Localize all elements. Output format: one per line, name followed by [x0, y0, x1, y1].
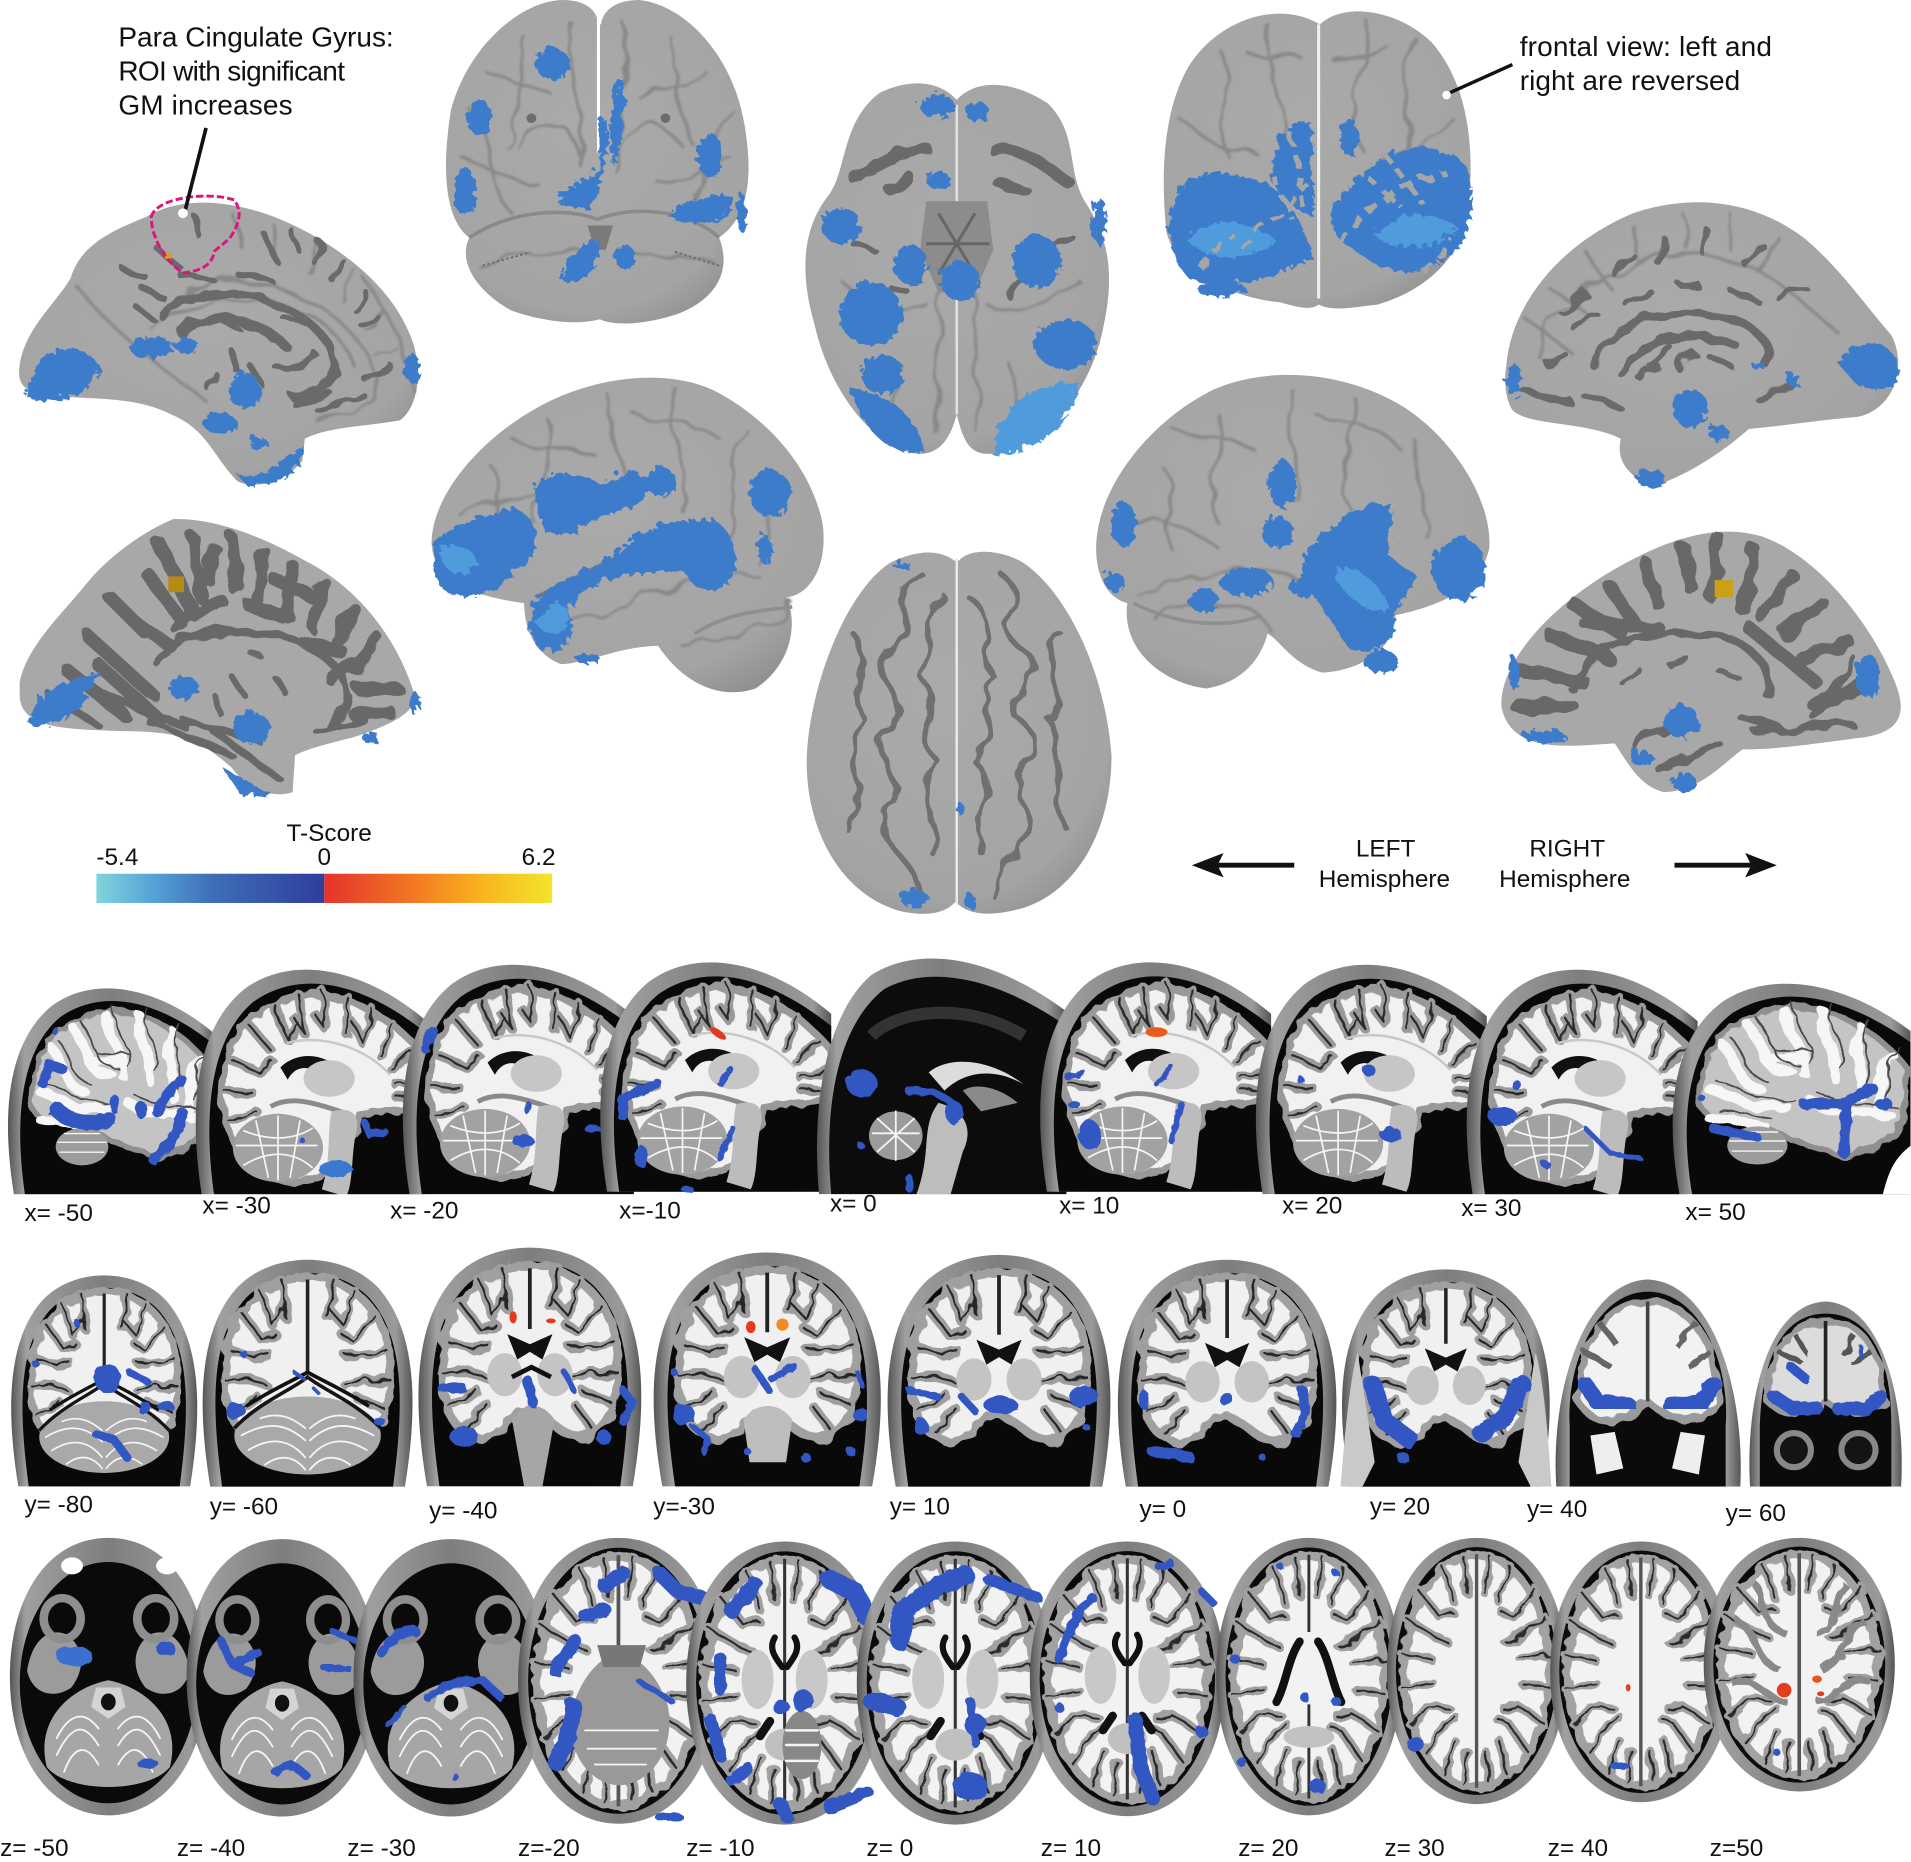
slice: axial z=-20 [518, 1538, 719, 1824]
annotation: Para Cingulate Gyrus [118, 21, 394, 121]
slice: sagittal x=-50 [8, 988, 216, 1195]
labels: coronal row: y= 20 [1370, 1494, 1430, 1521]
colour bar: T-Score: 0 [317, 844, 331, 871]
labels: sagittal row: x= -20 [390, 1198, 458, 1225]
slice: axial z=50 [1704, 1538, 1895, 1792]
annotation: Para Cingulate Gyrus: GM increases [118, 90, 293, 121]
brain: inferior view [805, 83, 1109, 454]
colour bar: T-Score: -5.4 [96, 844, 138, 871]
slice: sagittal x=20 [1256, 965, 1487, 1194]
labels: coronal row: y= 0 [1140, 1496, 1186, 1523]
brain: left inflated medial view [20, 519, 417, 794]
slice: coronal y=40 [1556, 1280, 1741, 1487]
slice: coronal y=-40 [418, 1248, 641, 1487]
colour bar: T-Score: 6.2 [522, 844, 556, 871]
labels: axial row: z= 40 [1548, 1835, 1608, 1862]
brain: left lateral view [431, 378, 824, 692]
labels: coronal row: y=-30 [653, 1494, 715, 1521]
slice: axial z=-40 [187, 1539, 378, 1817]
labels: sagittal row: x= -50 [24, 1200, 93, 1227]
slice: coronal y=0 [1118, 1260, 1336, 1489]
frontal view leader line [1442, 65, 1512, 99]
arrow: left [1192, 853, 1294, 877]
labels: axial row: z= -10 [686, 1835, 755, 1862]
slice: coronal y=-80 [11, 1275, 197, 1486]
annotation: Para Cingulate Gyrus: Para Cingulate Gyrus: [118, 21, 394, 52]
slice: sagittal x=-30 [196, 970, 427, 1199]
annotation: frontal view: frontal view: left and [1520, 31, 1772, 62]
arrow: right [1674, 853, 1777, 877]
brain: left medial view with ROI [19, 203, 418, 485]
slice: axial z=-50 [10, 1538, 207, 1815]
legend: right hemisphere: Hemisphere [1499, 866, 1630, 893]
labels: axial row: z= -30 [347, 1835, 416, 1862]
labels: axial row [0, 1835, 1763, 1862]
legend: left hemisphere: Hemisphere [1319, 866, 1450, 893]
labels: axial row: z=50 [1710, 1835, 1763, 1862]
slice: axial z=-30 [354, 1539, 548, 1817]
brain: superior view [807, 552, 1111, 914]
brain: right inflated medial view [1501, 532, 1901, 792]
legend: left hemisphere [1319, 836, 1450, 893]
slice: sagittal x=-10 [600, 962, 831, 1192]
labels: sagittal row [24, 1190, 1746, 1227]
labels: axial row: z= -50 [0, 1835, 69, 1862]
labels: coronal row: y= -40 [429, 1497, 497, 1524]
labels: sagittal row: x= -30 [202, 1193, 271, 1220]
labels: coronal row: y= -60 [210, 1494, 278, 1521]
slice: sagittal x=50 [1673, 984, 1911, 1195]
bottom edge of coronal row [0, 1487, 1911, 1499]
legend: left hemisphere: LEFT [1356, 836, 1416, 863]
slice: axial z=-10 [686, 1542, 883, 1825]
labels: sagittal row: x= 10 [1059, 1193, 1119, 1220]
slice: sagittal x=0 [817, 959, 1066, 1194]
slice: axial z=0 [857, 1542, 1054, 1825]
slice: coronal y=60 [1749, 1301, 1902, 1487]
labels: axial row: z= 20 [1238, 1835, 1298, 1862]
brain: frontal view [1164, 11, 1471, 309]
brain: right lateral view [1096, 375, 1489, 689]
slice: coronal y=-60 [203, 1260, 413, 1489]
colour bar: T-Score: T-Score [287, 820, 372, 847]
ROI outline: paracingulate gyrus [151, 196, 239, 273]
brain: posterior view [446, 0, 749, 324]
legend: right hemisphere [1499, 836, 1630, 893]
labels: axial row: z= -40 [177, 1835, 245, 1862]
slice: axial z=30 [1387, 1538, 1566, 1804]
brain: right medial view [1504, 202, 1898, 485]
labels: axial row: z=-20 [518, 1835, 580, 1862]
labels: coronal row: y= 10 [890, 1494, 950, 1521]
labels: coronal row: y= 40 [1527, 1496, 1587, 1523]
ROI leader line [178, 128, 206, 218]
colour bar: T-Score [96, 820, 556, 903]
bottom edge of sagittal row [0, 1194, 1911, 1209]
slice: coronal y=-30 [654, 1252, 881, 1486]
annotation: Para Cingulate Gyrus: ROI with significant [118, 55, 345, 86]
annotation: frontal view: right are reversed [1520, 65, 1740, 96]
slice: sagittal x=10 [1040, 962, 1271, 1192]
slice: axial z=40 [1550, 1542, 1731, 1802]
labels: coronal row: y= -80 [24, 1491, 93, 1518]
labels: axial row: z= 30 [1384, 1835, 1445, 1862]
labels: sagittal row: x= 50 [1685, 1199, 1746, 1226]
labels: sagittal row: x= 0 [830, 1190, 877, 1217]
labels: coronal row: y= 60 [1726, 1500, 1786, 1527]
labels: axial row: z= 0 [867, 1835, 913, 1862]
labels: axial row: z= 10 [1041, 1835, 1101, 1862]
slice: axial z=20 [1216, 1538, 1402, 1815]
labels: sagittal row: x= 30 [1461, 1195, 1521, 1222]
legend: right hemisphere: RIGHT [1529, 836, 1605, 863]
labels: sagittal row: x=-10 [619, 1198, 681, 1225]
annotation: frontal view [1520, 31, 1772, 96]
labels: coronal row [24, 1491, 1786, 1527]
labels: sagittal row: x= 20 [1282, 1193, 1342, 1220]
slice: sagittal x=-20 [403, 965, 634, 1194]
slice: coronal y=20 [1341, 1269, 1551, 1487]
slice: coronal y=10 [888, 1255, 1110, 1489]
slice: sagittal x=30 [1467, 970, 1698, 1199]
slice: axial z=10 [1030, 1542, 1225, 1816]
